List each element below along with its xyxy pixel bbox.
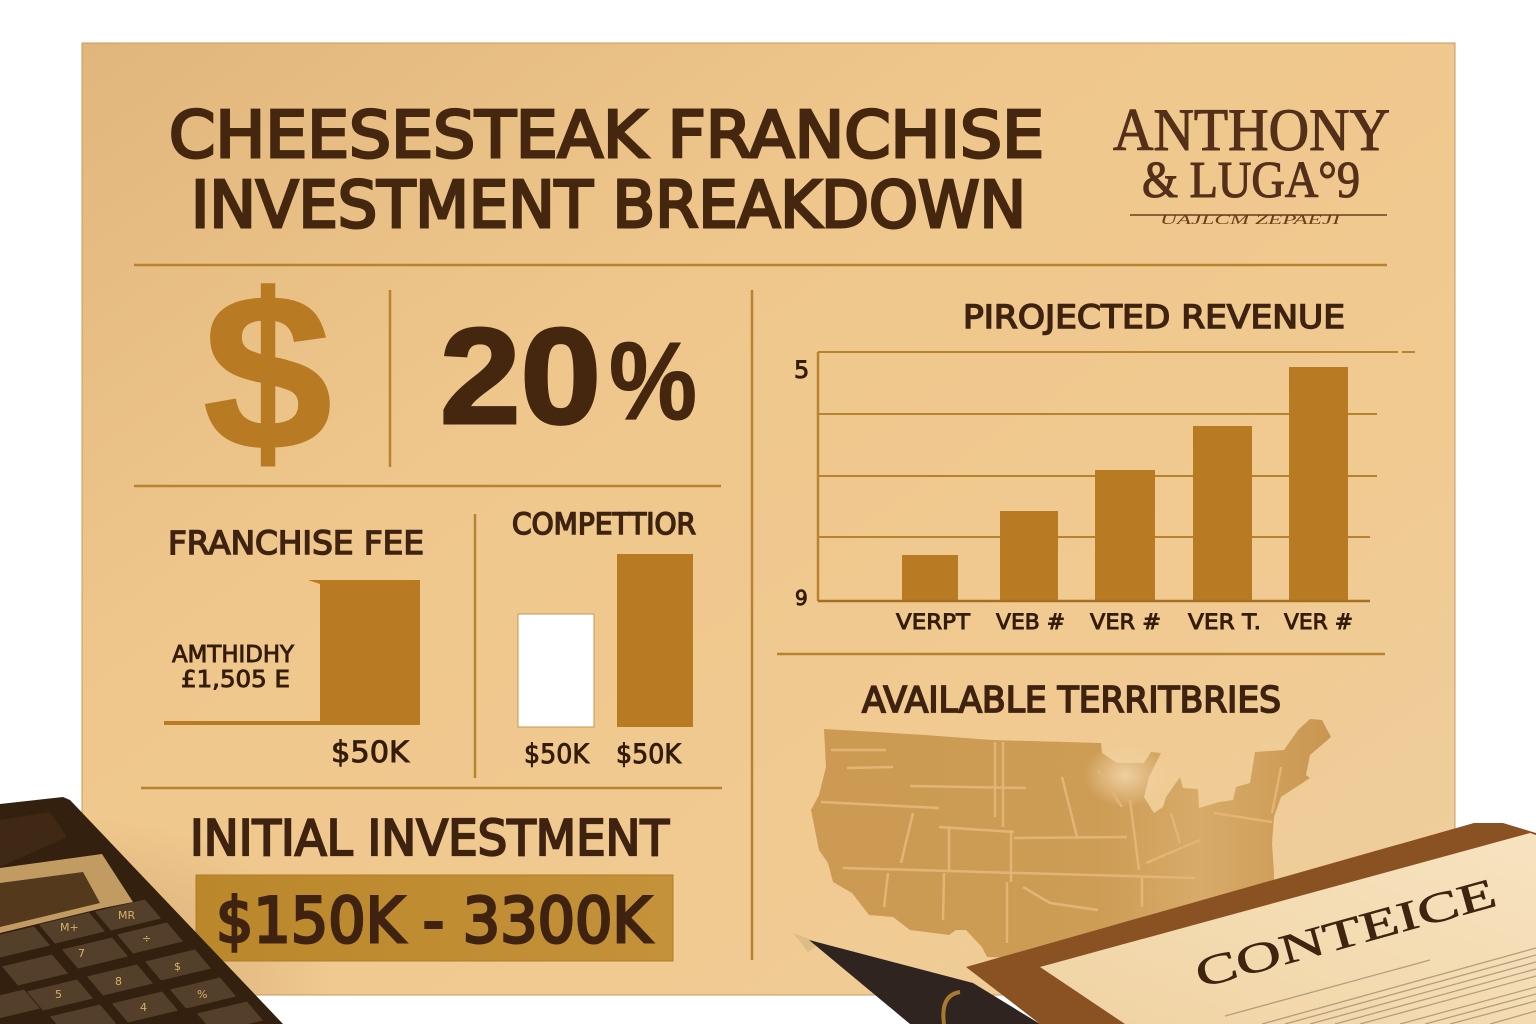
bars (902, 367, 1348, 600)
title (169, 99, 1044, 243)
heading: available territories: AVAILABLE TERRITBRIES (862, 680, 1281, 721)
calculator (0, 797, 283, 1024)
label: amount (172, 642, 295, 693)
panel: competitor (512, 507, 696, 770)
contract document (966, 823, 1536, 1024)
value labels: $50K (616, 739, 682, 770)
title: CHEESESTEAK FRANCHISE (169, 99, 1044, 173)
label: amount: AMTHIDHY (172, 642, 295, 668)
bar chart: projected revenue (794, 352, 1415, 634)
key glyphs (55, 909, 207, 1014)
bar: white (518, 614, 594, 727)
logo: Anthony & Luga's: & LUGA°9 (1142, 152, 1360, 209)
contract body text lines (1225, 948, 1536, 1024)
logo: Anthony & Luga's (1113, 97, 1390, 228)
heading: initial investment: INITIAL INVESTMENT (190, 810, 670, 867)
bar: franchise fee (164, 580, 420, 725)
axis labels: VER # (1090, 610, 1161, 634)
axis labels: 9 (795, 586, 808, 610)
key glyphs: 4 (140, 1001, 147, 1014)
axis labels: VER # (1284, 610, 1353, 634)
contract heading: CONTEICE (1190, 870, 1501, 998)
key glyphs: $ (174, 960, 181, 973)
title: INVESTMENT BREAKDOWN (191, 169, 1026, 243)
axis labels: VEB # (996, 610, 1065, 634)
calculator keys (0, 900, 263, 1024)
key glyphs: ÷ (142, 932, 151, 945)
key glyphs: M+ (60, 921, 79, 934)
value labels (524, 739, 682, 770)
axis labels: VER T. (1188, 610, 1261, 634)
callout: investment range: $150K - 3300K (216, 884, 652, 957)
key glyphs: MR (118, 909, 135, 922)
key glyphs: 5 (55, 988, 62, 1001)
heading: competitor: COMPETTIOR (512, 507, 696, 541)
grid lines and axes (818, 352, 1415, 601)
bar: competitor (617, 554, 693, 727)
heading: franchise fee: FRANCHISE FEE (168, 524, 424, 562)
map: United States territories (811, 719, 1331, 960)
value labels: $50K (524, 739, 590, 770)
stat: 20 percent: 20 (440, 300, 601, 452)
stat: 20 percent (440, 300, 697, 452)
axis labels (794, 356, 1353, 634)
pen (793, 933, 1040, 1024)
panel: franchise fee (164, 524, 424, 769)
value label: $50K (331, 735, 410, 769)
baseline (818, 600, 1370, 602)
section dividers (134, 265, 1387, 960)
key glyphs: 8 (115, 975, 122, 988)
axis labels: 5 (794, 356, 809, 384)
key glyphs: % (197, 988, 207, 1001)
heading: projected revenue: PIROJECTED REVENUE (963, 298, 1345, 336)
key glyphs: 7 (78, 947, 85, 960)
label: amount: £1,505 E (181, 667, 290, 693)
logo: Anthony & Luga's: UAJLCM ZEPAEJI (1160, 213, 1342, 228)
logo: Anthony & Luga's: ANTHONY (1113, 97, 1390, 163)
icon: dollar sign: $ (203, 249, 332, 497)
axis labels: VERPT (896, 610, 970, 634)
stat: 20 percent: % (609, 320, 697, 443)
